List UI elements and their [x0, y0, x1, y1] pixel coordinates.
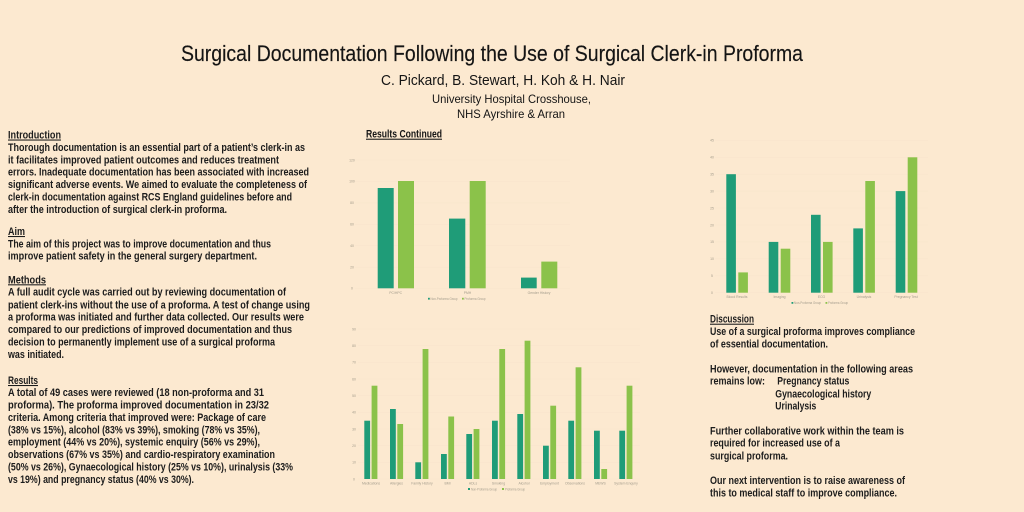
bar chart: history documentation: 80	[350, 201, 354, 205]
text block: methods: compared to our predictions of improved documentation and thus	[8, 324, 292, 336]
bar chart: history documentation	[349, 158, 570, 301]
bar chart: investigations: 15	[710, 240, 714, 244]
text block: discussion: of essential documentation.	[710, 339, 828, 351]
text block: introduction: Thorough documentation is an essential part of a patient’s clerk-in as	[8, 142, 305, 154]
panel: aim	[8, 226, 271, 263]
bar chart: investigations: 20	[710, 223, 714, 227]
text block: introduction: significant adverse events. We aimed to evaluate the completeness of	[8, 179, 307, 191]
panel: results	[8, 375, 293, 486]
bar chart: investigations: ECG	[818, 295, 826, 299]
bar chart: history documentation: Gender History	[528, 291, 551, 295]
legend: Proforma Group	[828, 301, 848, 305]
legend: Non-Proforma Group	[471, 487, 497, 491]
heading: aim: Aim	[8, 226, 25, 238]
text block: discussion	[710, 326, 915, 499]
text block: discussion: this to medical staff to improve compliance.	[710, 487, 897, 499]
bar chart: examination and social history: 10	[352, 461, 356, 465]
heading: introduction: Introduction	[8, 130, 61, 142]
affiliation	[432, 92, 591, 121]
title: Surgical Documentation Following the Use of Surgical Clerk-in Proforma	[181, 41, 803, 66]
text block: aim: improve patient safety in the general surgery department.	[8, 251, 257, 263]
bar chart: investigations: 35	[710, 172, 714, 176]
bar chart: examination and social history	[352, 327, 640, 491]
text block: aim	[8, 238, 271, 263]
bar chart: investigations: 40	[710, 156, 714, 160]
panel: discussion	[710, 314, 915, 499]
bar chart: investigations: 5	[711, 274, 713, 278]
text block: discussion: Urinalysis	[775, 401, 816, 413]
legend	[468, 487, 525, 491]
bar chart: investigations: 10	[710, 257, 714, 261]
bar chart: examination and social history: System Enquiry	[614, 482, 638, 486]
bar chart: history documentation: PC/HPC	[389, 291, 403, 295]
bar chart: investigations: Blood Results	[727, 295, 748, 299]
affiliation: University Hospital Crosshouse,	[432, 92, 591, 106]
text block: results: vs 19%) and pregnancy status (40% vs 30%).	[8, 474, 194, 486]
text block: results: (38% vs 15%), alcohol (83% vs 39%), smoking (78% vs 35%),	[8, 424, 260, 436]
legend: Proforma Group	[505, 487, 525, 491]
bar chart: examination and social history: 0	[353, 477, 355, 481]
bar chart: history documentation: 60	[350, 223, 354, 227]
panel: methods	[7, 274, 310, 361]
affiliation: NHS Ayrshire & Arran	[457, 107, 565, 121]
heading: results: Results	[8, 375, 38, 387]
text block: discussion: However, documentation in the following areas	[710, 363, 913, 375]
legend: Non-Proforma Group	[794, 301, 821, 305]
heading: discussion: Discussion	[710, 314, 754, 326]
text block: methods	[7, 287, 310, 361]
bar chart: investigations	[710, 139, 928, 305]
bar chart: investigations: Imaging	[773, 295, 786, 299]
bar chart: investigations: 0	[711, 291, 713, 295]
panel: introduction	[8, 130, 309, 216]
text block: discussion: Further collaborative work within the team is	[710, 425, 904, 437]
text block: introduction: clerk-in documentation against RCS England guidelines before and	[8, 192, 292, 204]
text block: results: (50% vs 26%), Gynaecological history (25% vs 10%), urinalysis (33%	[8, 462, 293, 474]
text block: discussion: Use of a surgical proforma improves compliance	[710, 326, 915, 338]
text block: discussion: required for increased use of a	[710, 438, 840, 450]
bar chart: history documentation: 20	[350, 266, 354, 270]
text block: discussion: remains low:	[710, 376, 765, 388]
bar chart: history documentation: 0	[351, 287, 353, 291]
bar chart: investigations: 25	[710, 206, 714, 210]
bar chart: history documentation: 40	[350, 244, 354, 248]
text block: methods: was initiated.	[7, 349, 64, 361]
bar chart: examination and social history: Medications	[362, 482, 380, 486]
bar chart: examination and social history: 40	[352, 411, 356, 415]
bar chart: examination and social history: 80	[352, 344, 356, 348]
legend: Non-Proforma Group	[430, 297, 458, 301]
text block: results	[8, 387, 293, 486]
bar chart: investigations: 45	[710, 139, 714, 143]
text block: discussion: Our next intervention is to raise awareness of	[710, 475, 905, 487]
bar chart: examination and social history: Observations	[565, 482, 585, 486]
legend	[428, 297, 486, 301]
bar chart: examination and social history: MEWS	[595, 482, 607, 486]
heading: results continued: Results Continued	[366, 129, 442, 141]
text block: methods: a proforma was initiated and further data collected. Our results were	[8, 312, 304, 324]
bar chart: examination and social history: Alcohol	[518, 482, 530, 486]
text block: results: observations (67% vs 35%) and cardio-respiratory examination	[8, 449, 275, 461]
bar chart: history documentation: 120	[349, 158, 355, 162]
text block: results: proforma). The proforma improved documentation in 23/32	[8, 400, 269, 412]
bar chart: investigations: Pregnancy Test	[894, 295, 918, 299]
text block: discussion: Pregnancy status	[777, 376, 849, 388]
text block: introduction: it facilitates improved patient outcomes and reduces treatment	[8, 154, 279, 166]
text block: methods: decision to permanently implement use of a surgical proforma	[8, 337, 275, 349]
bar chart: investigations: 30	[710, 189, 714, 193]
text block: results: criteria. Among criteria that improved were: Package of care	[8, 412, 266, 424]
bar chart: examination and social history: 70	[352, 361, 356, 365]
bar chart: history documentation: 100	[349, 180, 355, 184]
text block: introduction	[8, 142, 309, 216]
bar chart: history documentation: PMH	[464, 291, 472, 295]
text block: results: A total of 49 cases were reviewed (18 non-proforma and 31	[8, 387, 264, 399]
bar chart: examination and social history: 30	[352, 427, 356, 431]
text block: discussion: Gynaecological history	[775, 388, 871, 400]
bar chart: examination and social history: 50	[352, 394, 356, 398]
bar chart: examination and social history: Allergies	[390, 482, 403, 486]
text block: introduction: errors. Inadequate documentation has been associated with increased	[8, 167, 309, 179]
text block: results: employment (44% vs 20%), systemic enquiry (56% vs 29%),	[8, 437, 260, 449]
bar chart: examination and social history: 20	[352, 444, 356, 448]
bar chart: examination and social history: Smoking	[492, 482, 505, 486]
text block: discussion: surgical proforma.	[710, 450, 788, 462]
legend	[792, 301, 848, 305]
heading: methods: Methods	[8, 274, 46, 286]
bar chart: examination and social history: Employment	[540, 482, 559, 486]
authors: C. Pickard, B. Stewart, H. Koh & H. Nair	[381, 73, 625, 89]
legend: Proforma Group	[464, 297, 486, 301]
text block: methods: patient clerk-ins without the use of a proforma. A test of change using	[8, 299, 310, 311]
bar chart: investigations: Urinalysis	[857, 295, 872, 299]
text block: methods: A full audit cycle was carried out by reviewing documentation of	[8, 287, 286, 299]
bar chart: examination and social history: ADLs	[469, 482, 477, 486]
bar chart: examination and social history: 90	[352, 327, 356, 331]
text block: introduction: after the introduction of surgical clerk-in proforma.	[8, 204, 227, 216]
text block: aim: The aim of this project was to improve documentation and thus	[8, 238, 271, 250]
bar chart: examination and social history: 60	[352, 377, 356, 381]
bar chart: examination and social history: BMI	[444, 482, 451, 486]
bar chart: examination and social history: Family History	[411, 482, 433, 486]
